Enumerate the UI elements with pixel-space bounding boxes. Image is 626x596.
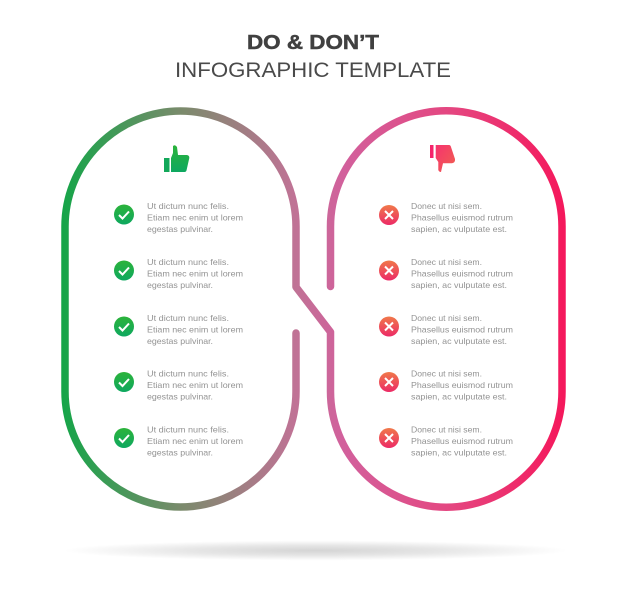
don't item 3: [379, 313, 513, 346]
don't item 2: Phasellus euismod rutrum: [411, 268, 513, 278]
do item 3: Etiam nec enim ut lorem: [147, 324, 243, 334]
do item 1: Ut dictum nunc felis.: [147, 201, 229, 211]
do item 1: egestas pulvinar.: [147, 224, 213, 234]
don't item 5: sapien, ac vulputate est.: [411, 448, 507, 458]
don't item 4: [379, 368, 513, 402]
icon: thumbs up: [164, 145, 189, 172]
do item 3: [114, 313, 243, 346]
do item 1: [114, 201, 243, 234]
don't item 2: [379, 257, 513, 290]
don't item 3: Phasellus euismod rutrum: [411, 324, 513, 334]
do item 1: Etiam nec enim ut lorem: [147, 212, 243, 222]
panel: do: [114, 145, 243, 457]
don't item 2: Donec ut nisi sem.: [411, 257, 482, 267]
don't item 4: Donec ut nisi sem.: [411, 368, 482, 378]
don't item 3: Donec ut nisi sem.: [411, 313, 482, 323]
do item 2: [114, 257, 243, 290]
don't item 1: sapien, ac vulputate est.: [411, 224, 507, 234]
gradient outline: do and don't panels: [65, 111, 562, 507]
ground shadow: [64, 540, 568, 560]
don't item 2: sapien, ac vulputate est.: [411, 280, 507, 290]
do item 5: egestas pulvinar.: [147, 448, 213, 458]
title: DO & DON’T: [247, 32, 379, 54]
do item 4: egestas pulvinar.: [147, 392, 213, 402]
don't item 1: Donec ut nisi sem.: [411, 201, 482, 211]
do item 5: Etiam nec enim ut lorem: [147, 436, 243, 446]
title: [175, 32, 451, 82]
do item 4: [114, 368, 243, 402]
do item 5: [114, 424, 243, 458]
do item 2: Ut dictum nunc felis.: [147, 257, 229, 267]
do item 3: Ut dictum nunc felis.: [147, 313, 229, 323]
don't item 3: sapien, ac vulputate est.: [411, 336, 507, 346]
do item 2: egestas pulvinar.: [147, 280, 213, 290]
don't item 1: Phasellus euismod rutrum: [411, 212, 513, 222]
do item 3: egestas pulvinar.: [147, 336, 213, 346]
do item 4: Ut dictum nunc felis.: [147, 368, 229, 378]
do item 2: Etiam nec enim ut lorem: [147, 268, 243, 278]
do item 4: Etiam nec enim ut lorem: [147, 380, 243, 390]
panel: don't: [379, 145, 513, 458]
do item 5: Ut dictum nunc felis.: [147, 424, 229, 434]
don't item 5: [379, 424, 513, 458]
don't item 4: Phasellus euismod rutrum: [411, 380, 513, 390]
don't item 5: Donec ut nisi sem.: [411, 424, 482, 434]
don't item 1: [379, 201, 513, 234]
don't item 5: Phasellus euismod rutrum: [411, 436, 513, 446]
icon: thumbs down: [430, 145, 455, 172]
don't item 4: sapien, ac vulputate est.: [411, 392, 507, 402]
title: INFOGRAPHIC TEMPLATE: [175, 59, 451, 82]
